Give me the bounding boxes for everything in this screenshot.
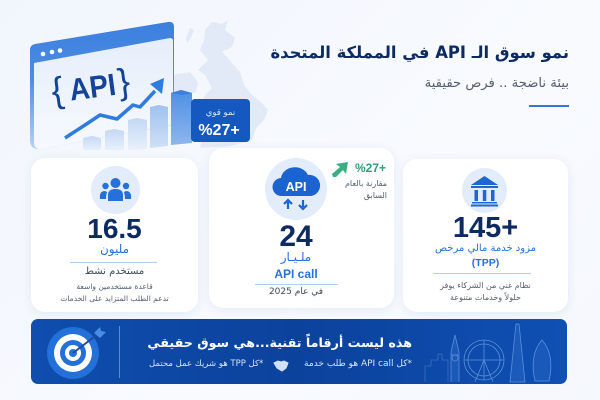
growth arrow: [65, 78, 164, 138]
growth chart bars: [83, 90, 192, 150]
description: حلولاً وخدمات متنوعة: [450, 293, 521, 302]
comparison value: %27+: [355, 161, 386, 175]
panel: TPP providers: [403, 159, 568, 312]
growth callout: [332, 161, 387, 200]
unit: ملـيـار: [281, 250, 311, 264]
stat: 16.5: 16.5: [87, 213, 142, 244]
API browser window: [30, 22, 174, 149]
banner note: API call: *كل API call هو طلب خدمة: [304, 359, 412, 369]
icon: target: [47, 327, 106, 379]
panel: active users: [31, 158, 198, 312]
subtitle: بيئة ناضجة .. فرص حقيقية: [425, 76, 569, 91]
description: قاعدة مستخدمين واسعة: [76, 282, 153, 291]
growth badge: نمو قوي: [206, 108, 235, 118]
year: في عام 2025: [269, 287, 323, 297]
title: نمو سوق الـ API في المملكة المتحدة: [270, 43, 569, 62]
API label: API: [67, 67, 118, 108]
hero illustration: UK map, API window, growth chart: [30, 20, 268, 150]
unit: مليون: [100, 242, 129, 256]
API label: }: [115, 60, 132, 102]
banner: [31, 319, 567, 384]
label: مستخدم نشط: [85, 266, 144, 277]
banner note: TPP: *كل TPP هو شريك عمل محتمل: [149, 359, 263, 369]
label: مزود خدمة مالي مرخص: [435, 243, 536, 254]
banner headline: هذه ليست أرقاماً تقنية...هي سوق حقيقي: [147, 335, 412, 350]
comparison note: [345, 179, 387, 200]
description: نظام غني من الشركاء يوفر: [440, 281, 531, 290]
icon: users: [91, 166, 140, 214]
API label: [49, 60, 132, 111]
stat: 145+: 145+: [453, 212, 518, 244]
API label: {: [49, 69, 66, 111]
icon: green arrow: [332, 162, 348, 177]
icon: handshake: [273, 360, 289, 372]
unit: API call: API call: [274, 267, 318, 281]
icon: API cloud: [265, 158, 327, 220]
label: TPP: (TPP): [472, 257, 499, 269]
comparison note: السابق: [364, 190, 387, 200]
panel: API calls: [209, 148, 394, 308]
title accent line: [529, 105, 569, 107]
description: [60, 282, 169, 303]
London skyline: [424, 324, 552, 382]
growth badge: %27+: [198, 122, 240, 139]
growth badge: [191, 99, 250, 142]
description: تدعم الطلب المتزايد على الخدمات: [60, 294, 169, 302]
UK map silhouette: [172, 20, 268, 148]
stat: 24: 24: [279, 220, 313, 253]
comparison note: مقارنة بالعام: [345, 179, 387, 188]
description: [440, 281, 531, 302]
icon: bank: [462, 168, 507, 213]
icon: API cloud: API: [286, 180, 306, 194]
